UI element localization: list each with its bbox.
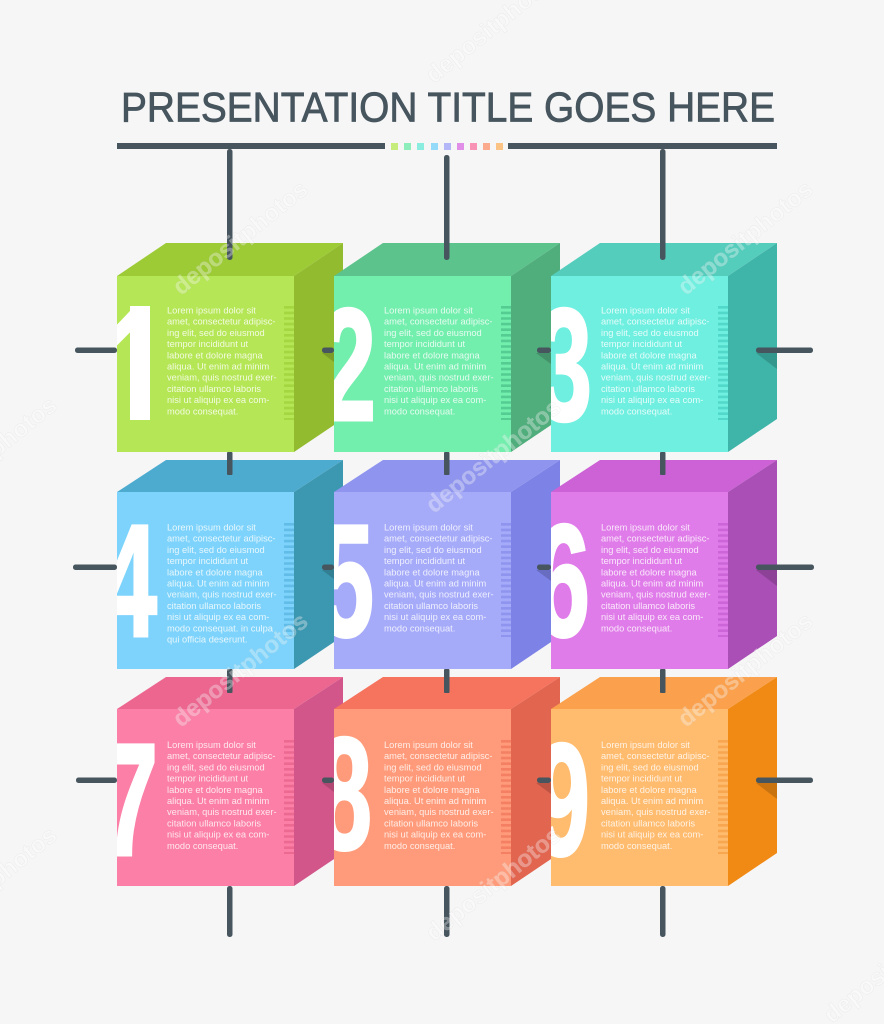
text block 3: modo consequat. bbox=[601, 406, 672, 416]
watermark: depositphotos bbox=[168, 176, 313, 301]
text block 4: Lorem ipsum dolor sit bbox=[167, 522, 256, 532]
text block 6: Lorem ipsum dolor sit bbox=[601, 522, 690, 532]
text block 7: modo consequat. bbox=[167, 841, 238, 851]
text block 2: veniam, quis nostrud exer- bbox=[384, 373, 494, 383]
text block 9: labore et dolore magna bbox=[601, 785, 697, 795]
text block 5: modo consequat. bbox=[384, 623, 455, 633]
connector lines bbox=[73, 149, 814, 937]
text block 2: citation ullamco laboris bbox=[384, 384, 478, 394]
number 1 bbox=[117, 306, 150, 420]
cube 7 bbox=[103, 677, 343, 890]
text block 9: Lorem ipsum dolor sit bbox=[601, 740, 690, 750]
number 3: 3 bbox=[537, 276, 592, 455]
cube 3 bbox=[537, 243, 777, 455]
watermark: depositphotos bbox=[421, 394, 566, 519]
text block 2: amet, consectetur adipisc- bbox=[384, 317, 493, 327]
text block 8: modo consequat. bbox=[384, 841, 455, 851]
text block 5: Lorem ipsum dolor sit bbox=[384, 522, 473, 532]
text block 8: tempor incididunt ut bbox=[384, 774, 466, 784]
text block 6: amet, consectetur adipisc- bbox=[601, 534, 710, 544]
text block 1: tempor incididunt ut bbox=[167, 339, 249, 349]
text block 4: citation ullamco laboris bbox=[167, 601, 261, 611]
text block 5: tempor incididunt ut bbox=[384, 556, 466, 566]
title: PRESENTATION TITLE GOES HERE bbox=[121, 84, 775, 130]
text block 2: modo consequat. bbox=[384, 406, 455, 416]
text block 7: tempor incididunt ut bbox=[167, 774, 249, 784]
text block 1: citation ullamco laboris bbox=[167, 384, 261, 394]
text block 6: aliqua. Ut enim ad minim bbox=[601, 578, 704, 588]
text block 1: aliqua. Ut enim ad minim bbox=[167, 362, 270, 372]
text block 8: aliqua. Ut enim ad minim bbox=[384, 796, 487, 806]
text block 8: veniam, quis nostrud exer- bbox=[384, 807, 494, 817]
text block 6: veniam, quis nostrud exer- bbox=[601, 590, 711, 600]
text block 6: modo consequat. bbox=[601, 623, 672, 633]
text block 9: citation ullamco laboris bbox=[601, 818, 695, 828]
text block 2: labore et dolore magna bbox=[384, 350, 480, 360]
text block 2: aliqua. Ut enim ad minim bbox=[384, 362, 487, 372]
text block 7: nisi ut aliquip ex ea com- bbox=[167, 830, 269, 840]
text block 8: Lorem ipsum dolor sit bbox=[384, 740, 473, 750]
text block 5: citation ullamco laboris bbox=[384, 601, 478, 611]
text block 9: veniam, quis nostrud exer- bbox=[601, 807, 711, 817]
text block 6: nisi ut aliquip ex ea com- bbox=[601, 612, 703, 622]
text block 5: veniam, quis nostrud exer- bbox=[384, 590, 494, 600]
text block 7: aliqua. Ut enim ad minim bbox=[167, 796, 270, 806]
text block 9: modo consequat. bbox=[601, 841, 672, 851]
text block 7: Lorem ipsum dolor sit bbox=[167, 740, 256, 750]
text block 4: veniam, quis nostrud exer- bbox=[167, 590, 277, 600]
text block 1: modo consequat. bbox=[167, 406, 238, 416]
text block 9: ing elit, sed do eiusmod bbox=[601, 762, 699, 772]
text block 8: ing elit, sed do eiusmod bbox=[384, 762, 482, 772]
number 4: 4 bbox=[102, 492, 157, 671]
cube 8 bbox=[317, 677, 560, 886]
text block 4: qui officia deserunt. bbox=[167, 634, 247, 644]
text block 9: aliqua. Ut enim ad minim bbox=[601, 796, 704, 806]
text block 3: ing elit, sed do eiusmod bbox=[601, 328, 699, 338]
text block 9: nisi ut aliquip ex ea com- bbox=[601, 830, 703, 840]
number 7: 7 bbox=[103, 711, 158, 890]
text block 3: aliqua. Ut enim ad minim bbox=[601, 362, 704, 372]
text block 7: ing elit, sed do eiusmod bbox=[167, 762, 265, 772]
text block 3: labore et dolore magna bbox=[601, 350, 697, 360]
text block 8: citation ullamco laboris bbox=[384, 818, 478, 828]
text block 7: veniam, quis nostrud exer- bbox=[167, 807, 277, 817]
text block 4: amet, consectetur adipisc- bbox=[167, 534, 276, 544]
text block 5: labore et dolore magna bbox=[384, 567, 480, 577]
text block 2: nisi ut aliquip ex ea com- bbox=[384, 395, 486, 405]
text block 8: amet, consectetur adipisc- bbox=[384, 751, 493, 761]
text block 3: veniam, quis nostrud exer- bbox=[601, 373, 711, 383]
stub shadows on cube side faces bbox=[322, 353, 777, 799]
cube 4 bbox=[102, 460, 343, 671]
text block 5: ing elit, sed do eiusmod bbox=[384, 545, 482, 555]
text block 4: nisi ut aliquip ex ea com- bbox=[167, 612, 269, 622]
text block 5: aliqua. Ut enim ad minim bbox=[384, 578, 487, 588]
watermark: depositphotos bbox=[421, 822, 566, 947]
text block 1: veniam, quis nostrud exer- bbox=[167, 373, 277, 383]
header rule with colour swatches bbox=[117, 143, 777, 150]
text block 1: nisi ut aliquip ex ea com- bbox=[167, 395, 269, 405]
cube 5 bbox=[319, 460, 560, 671]
watermark: depositphotos bbox=[673, 176, 818, 301]
text block 8: labore et dolore magna bbox=[384, 785, 480, 795]
text block 3: nisi ut aliquip ex ea com- bbox=[601, 395, 703, 405]
number 1: 1 bbox=[109, 276, 164, 455]
text block 7: citation ullamco laboris bbox=[167, 818, 261, 828]
text block 4: aliqua. Ut enim ad minim bbox=[167, 578, 270, 588]
cube 2 bbox=[321, 243, 560, 455]
text block 7: amet, consectetur adipisc- bbox=[167, 751, 276, 761]
text block 9: amet, consectetur adipisc- bbox=[601, 751, 710, 761]
watermark: depositphotos bbox=[168, 608, 313, 733]
text block 3: Lorem ipsum dolor sit bbox=[601, 306, 690, 316]
text block 1: amet, consectetur adipisc- bbox=[167, 317, 276, 327]
text block 1: ing elit, sed do eiusmod bbox=[167, 328, 265, 338]
text block 3: amet, consectetur adipisc- bbox=[601, 317, 710, 327]
text block 6: ing elit, sed do eiusmod bbox=[601, 545, 699, 555]
text block 4: labore et dolore magna bbox=[167, 567, 263, 577]
text block 4: modo consequat. in culpa bbox=[167, 623, 274, 633]
cube 9 bbox=[535, 677, 777, 890]
number 2: 2 bbox=[321, 276, 376, 455]
text block 1: labore et dolore magna bbox=[167, 350, 263, 360]
watermark: depositphotos bbox=[673, 608, 818, 733]
text block 5: amet, consectetur adipisc- bbox=[384, 534, 493, 544]
text block 2: ing elit, sed do eiusmod bbox=[384, 328, 482, 338]
text block 3: citation ullamco laboris bbox=[601, 384, 695, 394]
number 6: 6 bbox=[535, 492, 590, 671]
text block 5: nisi ut aliquip ex ea com- bbox=[384, 612, 486, 622]
text block 2: tempor incididunt ut bbox=[384, 339, 466, 349]
text block 4: tempor incididunt ut bbox=[167, 556, 249, 566]
text block 3: tempor incididunt ut bbox=[601, 339, 683, 349]
text block 7: labore et dolore magna bbox=[167, 785, 263, 795]
number 5: 5 bbox=[319, 492, 374, 671]
cube 6 bbox=[535, 460, 777, 671]
text block 9: tempor incididunt ut bbox=[601, 774, 683, 784]
text block 8: nisi ut aliquip ex ea com- bbox=[384, 830, 486, 840]
text block 4: ing elit, sed do eiusmod bbox=[167, 545, 265, 555]
text block 1: Lorem ipsum dolor sit bbox=[167, 306, 256, 316]
cube 1 bbox=[109, 243, 343, 455]
text block 6: citation ullamco laboris bbox=[601, 601, 695, 611]
text block 6: labore et dolore magna bbox=[601, 567, 697, 577]
number 9: 9 bbox=[535, 711, 590, 890]
text block 6: tempor incididunt ut bbox=[601, 556, 683, 566]
text block 2: Lorem ipsum dolor sit bbox=[384, 306, 473, 316]
number 8: 8 bbox=[317, 705, 372, 884]
